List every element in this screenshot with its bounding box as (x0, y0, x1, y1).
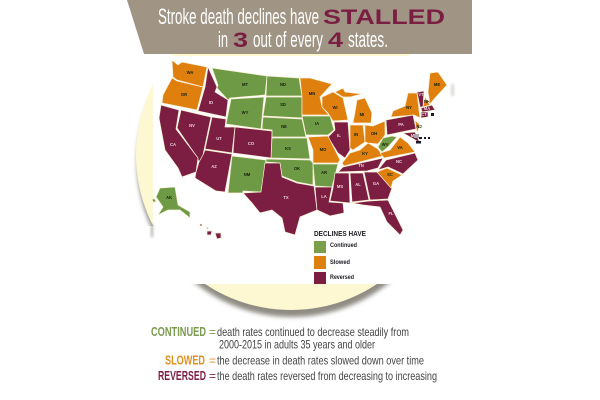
CT and RI: CT (421, 112, 427, 117)
title line 2: in (218, 27, 228, 52)
CA (159, 105, 198, 177)
ND: ND (280, 82, 286, 87)
title line 2: states. (348, 27, 388, 52)
KY: KY (362, 151, 368, 156)
UT (205, 117, 235, 153)
GA (364, 172, 392, 200)
DC and small state tags (414, 113, 434, 144)
CT and RI (421, 112, 428, 118)
definition: continued: CONTINUED (151, 324, 206, 339)
KS: KS (285, 146, 291, 151)
definition: continued (151, 324, 409, 352)
definition: continued: 2000-2015 in adults 35 years and older (219, 338, 375, 352)
legend (314, 229, 366, 284)
legend: reversed: Reversed (330, 274, 354, 281)
WY (226, 97, 264, 129)
WA (172, 60, 207, 87)
title line 1: Stroke death declines have (158, 4, 319, 29)
WV: WV (382, 142, 389, 147)
MN: MN (309, 91, 315, 96)
MT: MT (242, 82, 248, 87)
AZ: AZ (211, 164, 217, 169)
definition: reversed: the death rates reversed from decreasing to increasing (217, 369, 437, 383)
TN: TN (358, 163, 364, 168)
MI (335, 88, 372, 123)
MA (421, 105, 435, 112)
MS (330, 173, 350, 203)
OK: OK (294, 166, 300, 171)
HI (200, 224, 221, 239)
legend: slowed: Slowed (330, 259, 350, 266)
VA: VA (397, 145, 403, 150)
MN (300, 78, 332, 115)
title banner (127, 0, 472, 54)
NE (262, 117, 306, 137)
UT: UT (216, 136, 222, 141)
OK (266, 159, 313, 185)
ME: ME (434, 82, 440, 87)
NH (423, 97, 430, 107)
NM (228, 156, 266, 193)
KY (342, 143, 383, 166)
PA (386, 115, 416, 135)
title line 2 (218, 27, 388, 52)
MT (212, 68, 267, 100)
background circle with shadow (120, 0, 478, 317)
OH: OH (371, 131, 377, 136)
OH (365, 121, 385, 144)
OR (162, 78, 203, 110)
MA: MA (424, 106, 430, 111)
IA: IA (315, 121, 319, 126)
NC: NC (396, 159, 402, 164)
CA: CA (170, 142, 176, 147)
PA: PA (398, 122, 404, 127)
NY: NY (406, 105, 412, 110)
LA (315, 187, 344, 216)
FL (352, 200, 403, 235)
IN (350, 125, 365, 150)
TN (338, 158, 383, 172)
AK (156, 187, 190, 218)
NV: NV (189, 123, 195, 128)
TX: TX (283, 195, 289, 200)
OR: OR (181, 92, 187, 97)
IL: IL (337, 133, 341, 138)
SC: SC (387, 172, 393, 177)
MO (308, 136, 340, 163)
legend: continued: Continued (330, 242, 357, 249)
definition: slowed (165, 352, 424, 368)
KS (271, 138, 310, 159)
definition: slowed: SLOWED (165, 352, 205, 368)
ID: ID (209, 100, 213, 105)
NV (177, 110, 211, 162)
definition: reversed: = (209, 369, 216, 383)
CO: CO (248, 141, 255, 146)
definition: continued: death rates continued to decrease steadily from (217, 325, 409, 339)
WI: WI (332, 105, 338, 110)
definitions text (151, 324, 437, 383)
MD and DE (403, 132, 420, 143)
NJ: NJ (416, 124, 422, 129)
NY (391, 93, 420, 118)
TX (243, 163, 317, 235)
NJ (415, 120, 422, 133)
NM: NM (244, 172, 251, 177)
GA: GA (373, 181, 379, 186)
AL (350, 173, 369, 202)
ME (428, 72, 447, 104)
title line 1: STALLED (323, 6, 445, 29)
SD (263, 97, 302, 118)
MD and DE: MD (411, 133, 417, 138)
definition: slowed: the decrease in death rates slowed down over time (217, 354, 424, 368)
title line 2: out of every (253, 27, 323, 52)
VT: VT (418, 92, 424, 97)
definition: reversed: REVERSED (158, 368, 206, 383)
SD: SD (280, 102, 286, 107)
AR (313, 164, 338, 187)
WI (322, 92, 348, 121)
AR: AR (321, 170, 327, 175)
NH: NH (424, 99, 430, 104)
definition: continued: = (209, 325, 216, 339)
VT (417, 91, 424, 107)
AK: AK (166, 195, 172, 200)
SC (377, 168, 402, 188)
title line 2: 4 (328, 29, 343, 52)
MS: MS (337, 184, 343, 189)
definition: slowed: = (209, 354, 216, 368)
VA (380, 137, 415, 158)
WY: WY (242, 110, 249, 115)
ID (198, 67, 228, 117)
AZ (195, 150, 232, 192)
AK island (152, 199, 156, 202)
MI: MI (360, 112, 364, 117)
IA (302, 116, 334, 135)
legend title: DECLINES HAVE (314, 229, 366, 238)
IL (328, 122, 350, 158)
WV (378, 136, 397, 152)
FL: FL (388, 211, 394, 216)
US map of states (152, 60, 447, 239)
AL: AL (355, 182, 361, 187)
LA: LA (321, 194, 327, 199)
ND (266, 76, 302, 96)
NC (378, 153, 418, 174)
title line 2: 3 (233, 29, 248, 52)
NE: NE (281, 124, 287, 129)
definition: reversed (158, 368, 437, 383)
WA: WA (187, 70, 193, 75)
IN: IN (354, 132, 358, 137)
CO (233, 127, 272, 158)
MO: MO (320, 147, 327, 152)
